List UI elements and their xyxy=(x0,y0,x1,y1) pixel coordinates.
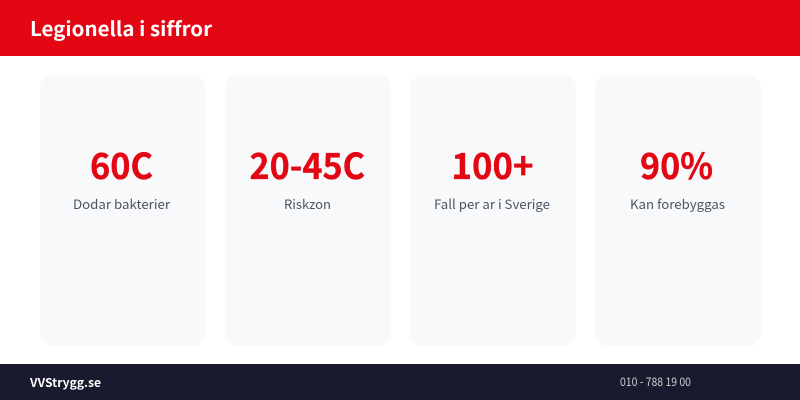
panel: 60C xyxy=(40,75,206,346)
phone number: 010 - 788 19 00 xyxy=(620,373,691,390)
stat value: 20-45C xyxy=(250,138,365,190)
panel: 90% xyxy=(595,75,761,346)
stat value: 100+ xyxy=(452,138,534,190)
stat label: Dodar bakterier xyxy=(73,194,171,213)
stat value: 90% xyxy=(640,138,713,190)
footer band xyxy=(0,364,800,400)
title: Legionella i siffror xyxy=(30,13,212,42)
stat label: Fall per ar i Sverige xyxy=(434,194,550,213)
header band xyxy=(0,0,800,56)
panel: 20-45C xyxy=(225,75,391,346)
stat label: Riskzon xyxy=(284,194,331,213)
stat label: Kan forebyggas xyxy=(630,194,725,213)
brand name: VVStrygg.se xyxy=(29,374,101,391)
stat value: 60C xyxy=(90,138,153,190)
panel: 100+ xyxy=(410,75,576,346)
